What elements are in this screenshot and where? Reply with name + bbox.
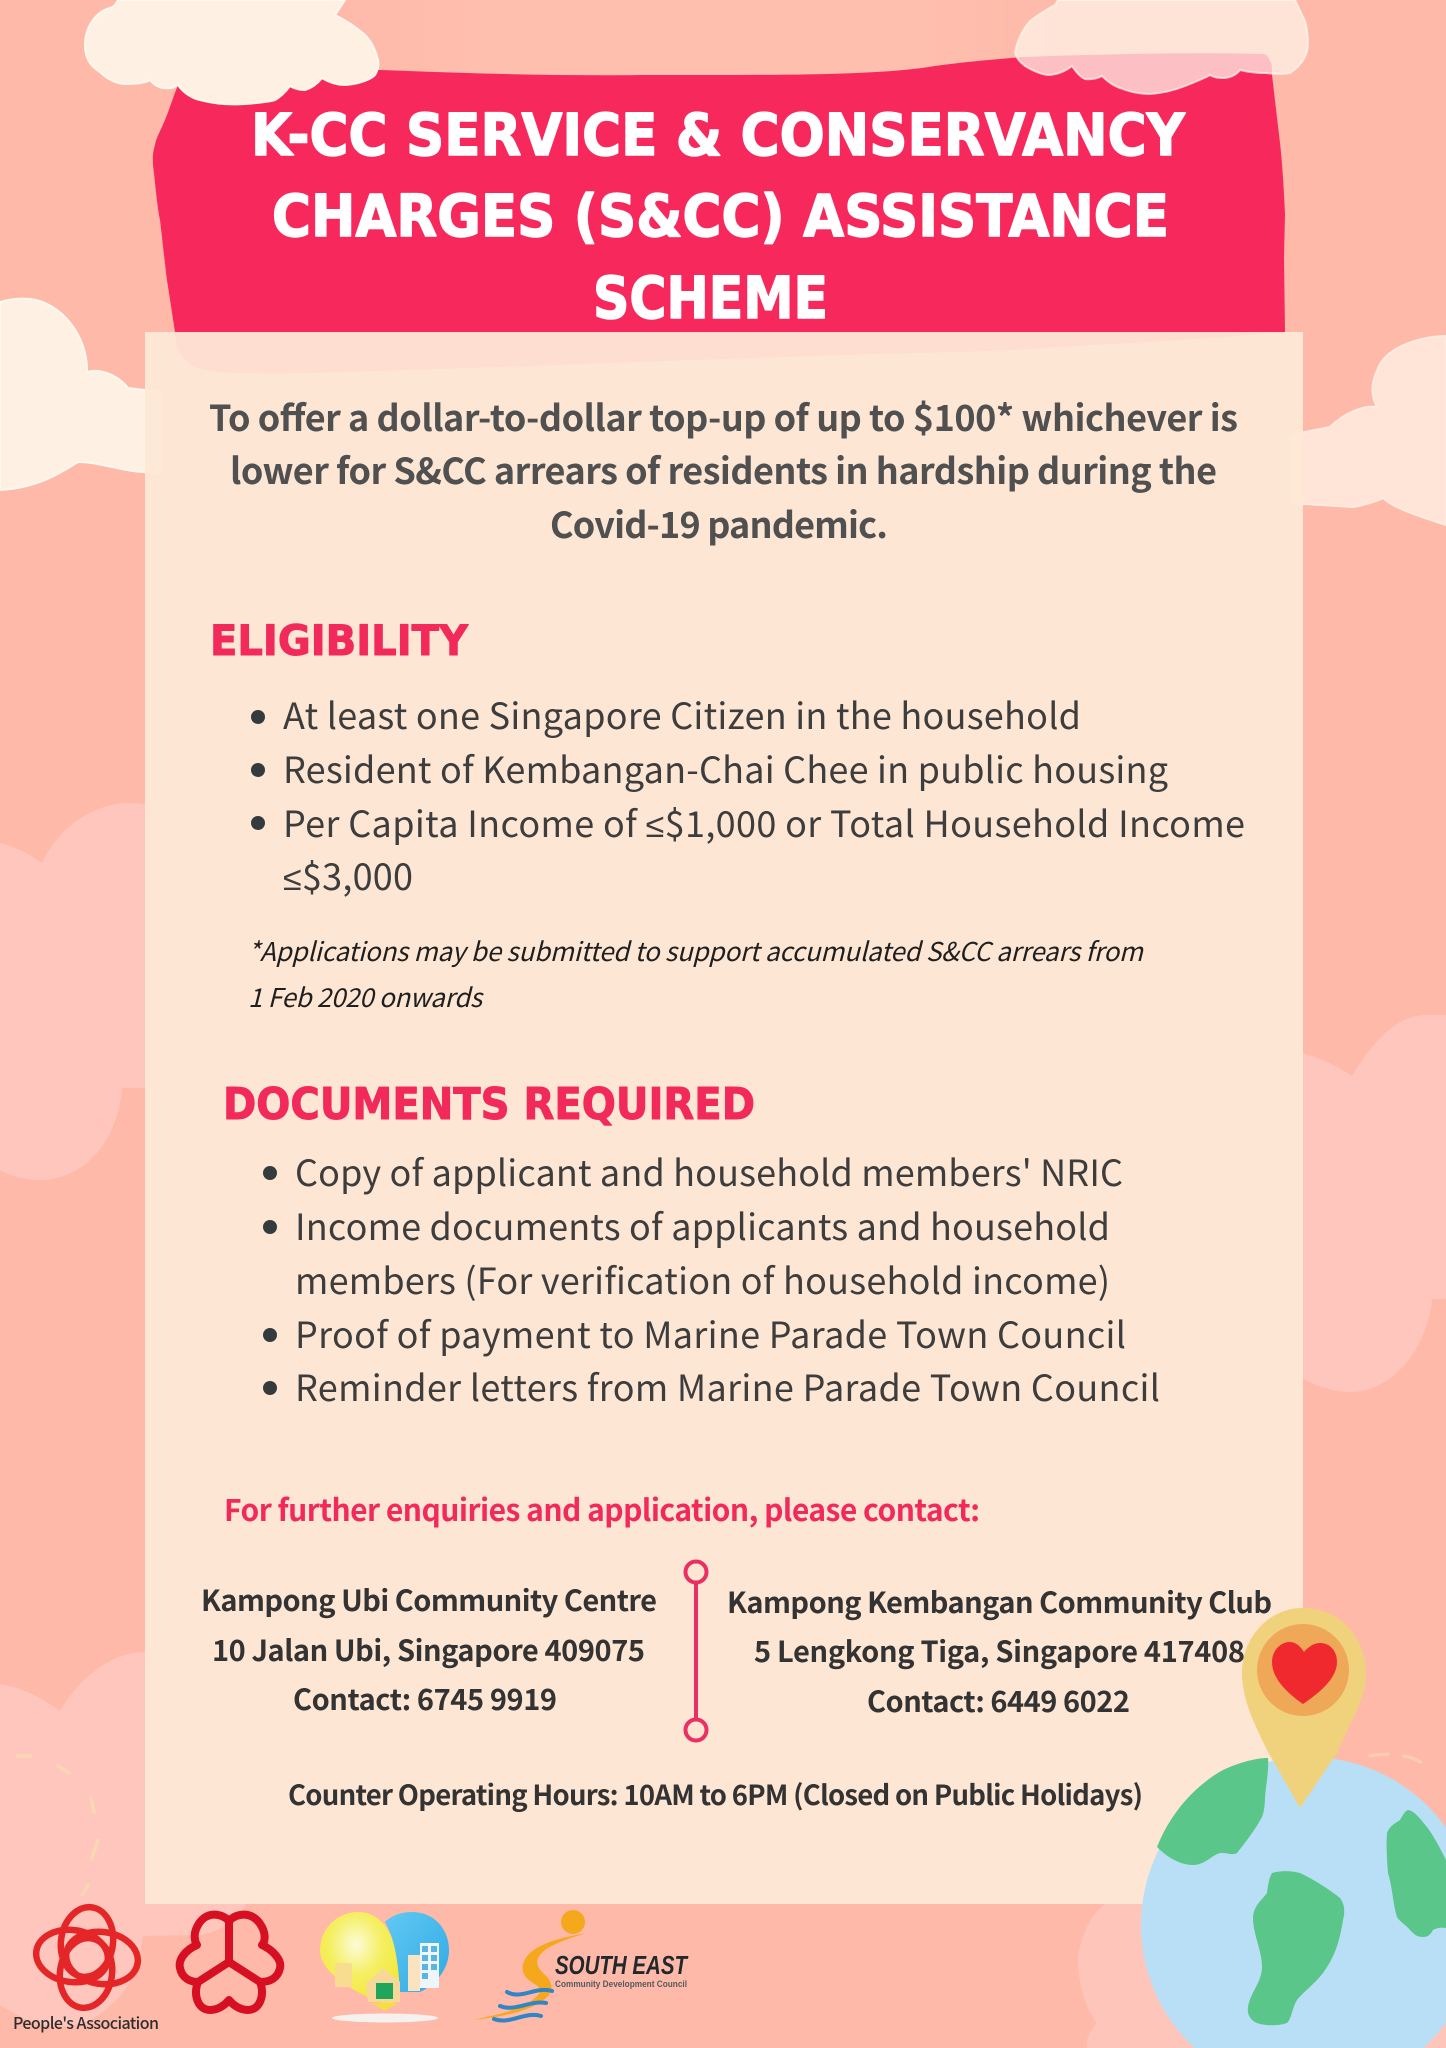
documents list: Proof of payment to Marine Parade Town Council (295, 1307, 1126, 1359)
documents list: Reminder letters from Marine Parade Town Council (295, 1360, 1160, 1412)
divider with end circles (686, 1562, 706, 1740)
pink cloud: right side (1260, 1015, 1446, 1392)
eligibility list: Per Capita Income of ≤$1,000 or Total Household Income (283, 796, 1245, 848)
pink cloud: left middle (0, 803, 200, 1180)
cloud: top right, translucent over banner (1015, 0, 1308, 94)
documents list: Copy of applicant and household members' NRIC (295, 1145, 1123, 1197)
logo: People's Association (13, 1904, 159, 2034)
pink cloud: bottom right (1078, 1904, 1446, 2048)
contact: Kampong Ubi (201, 1578, 657, 1719)
top background band (340, 0, 1060, 80)
eligibility footnote: 1 Feb 2020 onwards (248, 978, 485, 1015)
eligibility list: At least one Singapore Citizen in the household (283, 688, 1081, 740)
title: SCHEME (593, 264, 828, 332)
contact: Kampong Kembangan: Kampong Kembangan Community Club (727, 1580, 1272, 1622)
title banner (153, 53, 1285, 373)
contact: Kampong Ubi: Kampong Ubi Community Centre (201, 1578, 657, 1620)
contact: Kampong Kembangan: Contact: 6449 6022 (867, 1679, 1130, 1721)
eligibility list (251, 688, 1245, 901)
content panel (145, 332, 1303, 1904)
title: CHARGES (S&CC) ASSISTANCE (272, 182, 1169, 250)
logo: South East CDC (473, 1910, 689, 2021)
documents list (263, 1145, 1160, 1412)
contact heading: For further enquiries and application, please contact: (224, 1486, 980, 1530)
title (251, 101, 1186, 332)
intro text (209, 390, 1238, 549)
pink cloud: bottom left (0, 1652, 266, 2026)
documents list: Income documents of applicants and household (295, 1199, 1110, 1251)
eligibility list: ≤$3,000 (283, 849, 413, 901)
icon: map pin with heart (1242, 1608, 1366, 1808)
cloud: left (0, 299, 160, 490)
eligibility footnote (248, 932, 1144, 1015)
heading: eligibility: ELIGIBILITY (210, 616, 469, 665)
documents list: members (For verification of household income) (295, 1253, 1110, 1305)
logo: South East CDC: Community Development Council (555, 1979, 687, 1989)
title: K-CC SERVICE & CONSERVANCY (251, 101, 1186, 169)
operating hours: Counter Operating Hours: 10AM to 6PM (Closed on Public Holidays) (288, 1773, 1143, 1813)
intro text: To offer a dollar-to-dollar top-up of up to $100* whichever is (209, 390, 1238, 442)
eligibility list: Resident of Kembangan-Chai Chee in public housing (283, 742, 1168, 794)
icon: globe (1141, 1757, 1446, 2048)
logo: heart with buildings (320, 1912, 449, 2022)
intro text: Covid-19 pandemic. (550, 497, 888, 549)
cloud: top left (85, 0, 378, 104)
logo: People's Association: People's Association (13, 2010, 159, 2034)
contact: Kampong Kembangan (727, 1580, 1272, 1721)
heading: documents required: DOCUMENTS REQUIRED (223, 1079, 755, 1130)
cloud: right (1290, 336, 1446, 525)
contact: Kampong Kembangan: 5 Lengkong Tiga, Singapore 417408 (754, 1629, 1245, 1671)
contact: Kampong Ubi: 10 Jalan Ubi, Singapore 409075 (212, 1628, 645, 1670)
logo: South East CDC: SOUTH EAST (555, 1950, 689, 1980)
eligibility footnote: *Applications may be submitted to support accumulated S&CC arrears from (248, 932, 1144, 969)
contact: Kampong Ubi: Contact: 6745 9919 (293, 1677, 557, 1719)
intro text: lower for S&CC arrears of residents in hardship during the (230, 443, 1217, 495)
logo: red trefoil (180, 1915, 280, 2010)
decorative dashed path (17, 1754, 1428, 1895)
